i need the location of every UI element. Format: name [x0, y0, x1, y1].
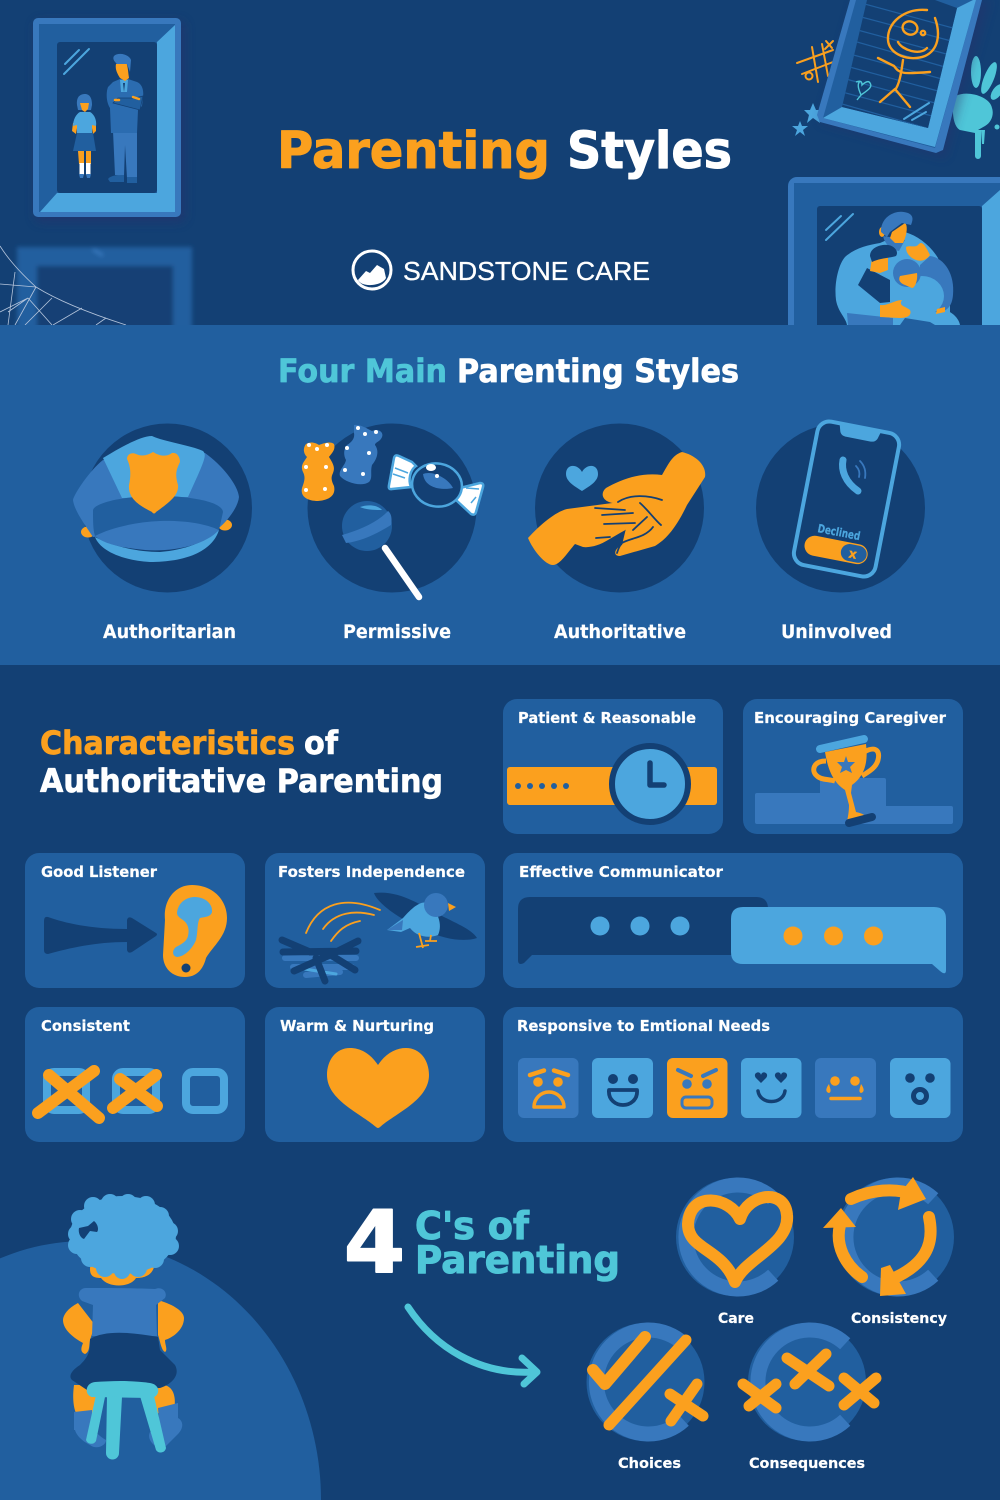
heading: 4 C's of parenting [344, 1193, 620, 1293]
emoji: grin [592, 1058, 653, 1118]
style: authoritative [528, 424, 705, 643]
title [281, 129, 730, 180]
C: care [676, 1178, 794, 1327]
picture frame: family hug [788, 177, 1000, 325]
panel: encouraging caregiver [743, 699, 963, 834]
heading: 4 C's of parenting: Parenting [415, 1238, 620, 1282]
panel: warm and nurturing [265, 1007, 485, 1142]
spider web [0, 246, 126, 325]
skirt [70, 1333, 177, 1392]
panel: responsive to emotional needs [503, 1007, 963, 1142]
heading: characteristics of authoritative parenting: Authoritative Parenting [40, 762, 443, 800]
icon: lollipop [342, 501, 419, 597]
emoji: scared [518, 1058, 578, 1118]
scribble: cycle arrows [839, 1190, 931, 1280]
panel: encouraging caregiver: Encouraging Caregiver [754, 709, 946, 727]
daughter figure [72, 94, 96, 178]
icon: holding hands [528, 452, 705, 565]
panel: responsive to emotional needs: Responsive to Emtional Needs [517, 1017, 770, 1035]
decline slider: x [847, 547, 859, 563]
arrow into ear [44, 917, 157, 954]
emoji: in love [741, 1058, 802, 1118]
emoji: angry [667, 1058, 728, 1118]
C: consequences [743, 1323, 876, 1472]
tilted picture frame: child drawing [817, 0, 990, 158]
scribble: check, slash, cross [593, 1337, 703, 1425]
heading: Four Main [278, 352, 447, 390]
heading: characteristics of authoritative parenting: Characteristics [40, 724, 295, 762]
curved floor background [0, 1241, 321, 1500]
scribble: heart [688, 1197, 787, 1282]
heading: 4 C's of parenting: 4 [344, 1193, 405, 1293]
C: choices [586, 1323, 704, 1472]
icon: heart [327, 1048, 429, 1128]
family figures [835, 212, 960, 325]
child legs [73, 1385, 175, 1415]
afro hair [68, 1194, 179, 1279]
icon: blue gummy bear [340, 425, 382, 484]
C: consistency [823, 1177, 954, 1327]
icon: checkboxes [47, 1072, 224, 1110]
scribble: three crosses [743, 1354, 876, 1408]
panel: fosters independence: Fosters Independence [278, 863, 465, 881]
emoji: surprised [890, 1058, 950, 1118]
panel: patient and reasonable: Patient & Reasonable [518, 709, 696, 727]
logo: Sandstone Care: SANDSTONE CARE [403, 256, 650, 286]
hair bow [79, 1221, 98, 1239]
picture frame: authoritarian parent and child [33, 18, 185, 222]
tic-tac-toe scribble [797, 41, 833, 82]
section: four main parenting styles [0, 325, 1000, 665]
ruled lines and stick figure [842, 4, 952, 128]
arrow: to the four Cs [408, 1307, 537, 1384]
icon: wrapped candy [389, 455, 483, 515]
icon: flight arcs [306, 903, 380, 941]
illustration: child on stool from behind [63, 1194, 184, 1460]
shirt [79, 1288, 166, 1336]
panel: patient and reasonable [503, 699, 723, 834]
label: Authoritative [554, 621, 686, 643]
C: consistency: Consistency [851, 1311, 948, 1327]
icon: ear [163, 885, 227, 977]
stool [86, 1381, 166, 1460]
style: uninvolved [756, 418, 925, 643]
neck and head [90, 1260, 155, 1286]
scribbled crosses [38, 1071, 157, 1118]
icon: nest [282, 940, 358, 981]
icon: trophy [814, 739, 879, 823]
title: Styles [567, 122, 732, 181]
icon: call symbol [843, 460, 865, 491]
icon: heart [566, 466, 598, 491]
heading [278, 352, 739, 390]
panel: good listener [25, 853, 245, 988]
emoji: crying [815, 1058, 876, 1118]
style: authoritarian [73, 424, 252, 643]
panel: consistent: Consistent [41, 1017, 131, 1035]
speech bubble: dark [518, 897, 768, 964]
label: Uninvolved [781, 621, 892, 643]
panel: warm and nurturing: Warm & Nurturing [280, 1017, 434, 1035]
label: Permissive [343, 621, 451, 643]
logo: Sandstone Care [353, 251, 650, 289]
father figure [107, 54, 143, 183]
heading: Parenting Styles [457, 352, 739, 390]
icon: phone: Declined [817, 521, 861, 543]
header section [0, 0, 1000, 347]
arms [63, 1300, 184, 1354]
panel: effective communicator [503, 853, 963, 988]
panel: consistent [25, 1007, 245, 1142]
C: consequences: Consequences [749, 1456, 865, 1472]
socks and shoes [74, 1403, 182, 1448]
handprint [953, 56, 1000, 159]
icon: wristwatch [507, 746, 717, 822]
heading: characteristics of authoritative parenting: of [304, 724, 339, 762]
C: care: Care [718, 1311, 754, 1327]
panel: fosters independence [265, 853, 485, 988]
ghost picture frame [17, 247, 192, 337]
panel: good listener: Good Listener [41, 863, 157, 881]
icon: phone [792, 418, 901, 579]
C: choices: Choices [618, 1456, 681, 1472]
label: Authoritarian [103, 621, 236, 643]
title: Parenting [277, 122, 550, 181]
style: permissive [302, 424, 483, 643]
icon: bird [374, 893, 477, 948]
icon: police cap [73, 436, 239, 562]
speech bubble: light [731, 907, 946, 973]
podium [755, 778, 953, 824]
panel: effective communicator: Effective Communicator [519, 863, 723, 881]
decline slider [803, 534, 869, 566]
heading: characteristics of authoritative parenting [40, 724, 443, 800]
stars [792, 103, 823, 136]
icon: orange gummy bear [302, 442, 334, 501]
heading: 4 C's of parenting: C's of [415, 1204, 529, 1248]
